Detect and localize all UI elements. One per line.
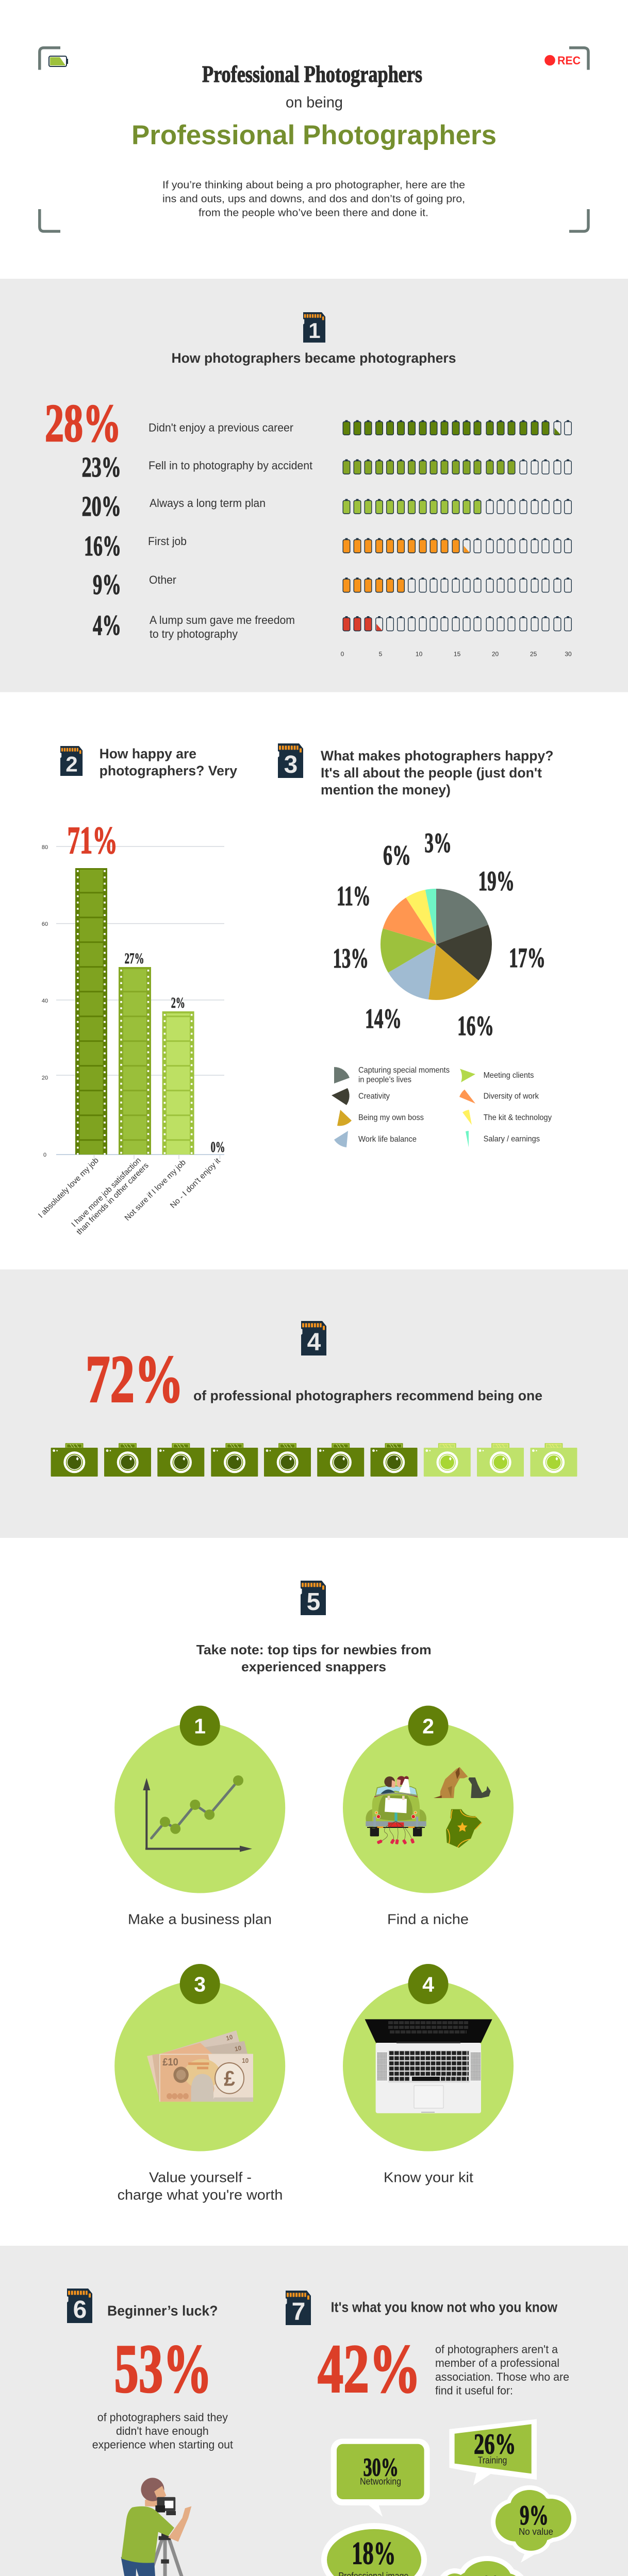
tip 2: find a niche: 2 [422, 1715, 434, 1738]
bar values: 27% [125, 950, 144, 967]
bar axis labels: I absolutely love my job [37, 1156, 101, 1220]
53% caption: experience when starting out [92, 2438, 233, 2451]
battery chart axis: 5 [379, 650, 383, 657]
film strip bar 27% [119, 967, 151, 1155]
panel: what makes photographers happy [278, 743, 554, 1147]
speech bubble: professional image [321, 2523, 427, 2576]
big statistic 53%: 53% [114, 2331, 212, 2407]
viewfinder corner brackets [40, 48, 588, 231]
tip 3: value yourself: 3 [194, 1972, 206, 1996]
percentages [45, 394, 121, 641]
bar axis labels [37, 1156, 222, 1236]
heading: photographers? Very [100, 763, 237, 778]
row labels: Didn't enjoy a previous career [148, 421, 293, 434]
bar chart: job satisfaction [37, 819, 225, 1236]
tip 1: business plan: 1 [194, 1715, 206, 1738]
percentages: 4% [93, 609, 121, 641]
film strip bar 71% [75, 868, 107, 1155]
42% caption: find it useful for: [435, 2384, 513, 2397]
speech bubble: training: 26% [474, 2429, 516, 2461]
speech bubble: networking [331, 2439, 430, 2517]
panel: 72% recommend [0, 1269, 628, 1538]
bar chart: job satisfaction: 40 [42, 998, 48, 1004]
heading: What makes photographers happy? [321, 748, 554, 764]
bar axis labels: No - I don't enjoy it [169, 1156, 222, 1210]
speech bubble: training [450, 2419, 537, 2485]
tip 3: value yourself [114, 1964, 285, 2203]
tip 4: know your kit: Know your kit [384, 2169, 473, 2185]
bar values [67, 819, 225, 1156]
pie legend: Creativity [358, 1092, 390, 1100]
pie legend [332, 1066, 552, 1147]
heading: Take note: top tips for newbies from [196, 1642, 432, 1657]
battery chart axis [341, 650, 572, 657]
heading: It's all about the people (just don't [321, 765, 542, 781]
battery chart axis: 20 [492, 650, 499, 657]
heading: what you know: It's what you know not who you know [331, 2299, 557, 2315]
icon: banknotes: £10 [162, 2057, 178, 2068]
pie percentages: 13% [333, 943, 369, 974]
icon: banknotes [147, 2030, 253, 2102]
pie percentages: 17% [509, 942, 546, 973]
tip 3: value yourself: Value yourself - [149, 2169, 252, 2185]
icon: memory card 1 [303, 312, 325, 343]
42% caption: of photographers aren't a [435, 2343, 558, 2356]
bar chart: job satisfaction: 60 [42, 921, 48, 927]
icon: banknotes: 10 [225, 2033, 234, 2042]
tip 1: business plan [114, 1706, 285, 1927]
intro text: If you’re thinking about being a pro photographer, here are the [162, 179, 465, 191]
heading [100, 746, 237, 778]
pie percentages: 6% [383, 840, 411, 871]
panel: beginner's luck and professional associations [0, 2246, 628, 2576]
bar axis labels: I have more job satisfaction [70, 1156, 143, 1229]
percentages: 9% [93, 569, 121, 600]
icon: wedding car, dogs, baby grow [366, 1767, 491, 1848]
pie legend: Salary / earnings [484, 1134, 540, 1144]
percentages: 20% [81, 490, 121, 522]
percentages: 28% [45, 394, 121, 453]
42% caption: association. Those who are [435, 2370, 569, 2383]
tip 2: find a niche [343, 1706, 514, 1927]
icon: memory card 4 [301, 1321, 326, 1356]
title line 1: Professional Photographers [202, 61, 422, 87]
title line 2: on being [286, 94, 343, 111]
bar chart: job satisfaction: 0 [43, 1152, 46, 1158]
icon: memory card 6: 6 [73, 2296, 87, 2324]
speech bubble: discounts [437, 2556, 529, 2576]
illustration: photographer with tripod [121, 2478, 200, 2576]
pie percentages: 3% [424, 827, 452, 858]
icon: memory card 5 [301, 1581, 326, 1616]
intro text [162, 179, 465, 218]
row labels [148, 421, 312, 640]
bar values: 2% [171, 994, 185, 1011]
heading [321, 748, 554, 798]
icon: memory card 3 [278, 743, 303, 778]
icon: memory card 7: 7 [292, 2298, 305, 2326]
row labels: Other [149, 573, 176, 586]
pie chart [381, 889, 492, 1000]
tip 1: business plan: Make a business plan [128, 1911, 272, 1927]
53% caption [92, 2411, 233, 2451]
pie legend: Capturing special moments [358, 1066, 450, 1075]
tip 4: know your kit [343, 1964, 514, 2185]
percentages: 16% [84, 530, 121, 562]
battery chart axis: 25 [530, 650, 537, 657]
panel: how happy are photographers [37, 746, 237, 1236]
intro text: ins and outs, ups and downs, and dos and don’ts of going pro, [162, 194, 465, 205]
icon: memory card 4: 4 [307, 1329, 321, 1356]
percentages: 23% [81, 451, 121, 483]
icon: banknotes: 10 [242, 2057, 249, 2064]
icon: memory card 5: 5 [307, 1588, 320, 1616]
icon: line chart [143, 1775, 252, 1852]
battery chart axis: 10 [416, 650, 423, 657]
icon: memory card 2 [60, 746, 82, 776]
53% caption: didn't have enough [116, 2425, 209, 2437]
speech bubble: no value: No value [519, 2527, 553, 2537]
row labels: to try photography [150, 628, 238, 640]
icon: memory card 3: 3 [284, 751, 298, 778]
53% caption: of photographers said they [97, 2411, 228, 2424]
panel: how photographers became photographers [0, 279, 628, 692]
icon: memory card 6 [67, 2289, 92, 2324]
heading: experienced snappers [241, 1659, 386, 1674]
pie legend: Diversity of work [484, 1092, 539, 1100]
bar axis labels: than friends in other careers [75, 1161, 151, 1236]
pie percentages: 16% [457, 1010, 494, 1041]
heading: How happy are [100, 746, 196, 761]
panel: header [40, 48, 588, 231]
title line 3: Professional Photographers [131, 120, 497, 150]
bar values: 0% [211, 1139, 225, 1156]
pie percentages: 14% [365, 1003, 402, 1034]
panel: top tips [114, 1581, 514, 2203]
icon: REC indicator: REC [557, 54, 581, 67]
camera pictogram row [51, 1443, 577, 1477]
bar values: 71% [67, 819, 118, 862]
pie percentages: 11% [337, 880, 370, 911]
row labels: Always a long term plan [150, 497, 266, 510]
icon: laptop [365, 2019, 492, 2113]
row labels: First job [148, 535, 187, 548]
bar axis labels: Not sure if I love my job [123, 1158, 188, 1223]
bar chart: job satisfaction: 80 [42, 844, 48, 851]
heading: How photographers became photographers [171, 350, 456, 366]
row labels: Fell in to photography by accident [148, 459, 312, 472]
icon: memory card 7 [286, 2291, 311, 2326]
speech bubble: no value [491, 2485, 576, 2563]
pie legend: The kit & technology [484, 1113, 552, 1122]
pie legend: in people’s lives [358, 1076, 411, 1084]
heading [196, 1642, 432, 1674]
tip 3: value yourself: charge what you're worth [118, 2187, 283, 2203]
icon: memory card 2: 2 [65, 752, 78, 776]
speech bubble: professional image: 18% [352, 2536, 396, 2571]
icon: banknotes: £ [224, 2067, 235, 2091]
speech bubble: networking: Networking [360, 2476, 401, 2486]
speech bubble: no value: 9% [520, 2500, 549, 2531]
tip 4: know your kit: 4 [422, 1972, 434, 1996]
row labels: A lump sum gave me freedom [150, 614, 295, 626]
speech bubble: networking: 30% [363, 2452, 399, 2481]
icon: REC indicator [544, 54, 581, 67]
bar chart: job satisfaction: 20 [42, 1075, 48, 1081]
statistic caption: of professional photographers recommend being one [193, 1388, 542, 1403]
heading: mention the money) [321, 782, 451, 798]
big statistic 42%: 42% [318, 2331, 421, 2407]
heading: beginner's luck: Beginner’s luck? [107, 2303, 218, 2318]
pie legend: Being my own boss [358, 1113, 424, 1122]
icon: memory card 1: 1 [308, 318, 321, 343]
pie legend: Meeting clients [484, 1071, 534, 1080]
battery chart [343, 420, 571, 631]
speech bubble: training: Training [478, 2455, 507, 2466]
pie legend: Work life balance [358, 1135, 417, 1144]
tip 2: find a niche: Find a niche [387, 1911, 469, 1927]
42% caption [435, 2343, 569, 2397]
big statistic: 72% [86, 1342, 184, 1417]
pie percentages: 19% [478, 866, 515, 896]
battery chart axis: 0 [341, 650, 344, 657]
battery chart axis: 15 [454, 650, 461, 657]
battery chart axis: 30 [565, 650, 572, 657]
pie percentages [333, 827, 546, 1041]
icon: battery [49, 56, 68, 66]
film strip bar 2% [162, 1011, 194, 1155]
icon: banknotes: 10 [234, 2044, 242, 2053]
intro text: from the people who’ve been there and done it. [199, 207, 428, 218]
42% caption: member of a professional [435, 2357, 559, 2369]
